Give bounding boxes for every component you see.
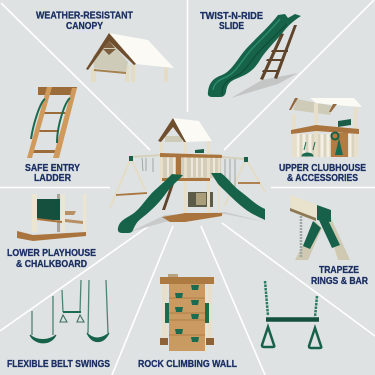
heading: weather-resistant canopy: WEATHER-RESISTANT [36, 10, 133, 22]
heading: twist-n-ride slide [200, 10, 263, 32]
swing frame right [222, 157, 265, 205]
heading: lower playhouse and chalkboard [7, 247, 96, 270]
right slide [211, 173, 265, 220]
heading: rock climbing wall: ROCK CLIMBING WALL [138, 358, 237, 370]
heading: safe entry ladder: LADDER [34, 172, 71, 184]
heading: flexible belt swings: FLEXIBLE BELT SWINGS [7, 358, 110, 370]
icon: lower playhouse [17, 194, 86, 241]
icon: upper clubhouse [289, 98, 362, 157]
icon: slide [208, 14, 301, 98]
swing frame left [110, 155, 162, 208]
icon: ladder [27, 87, 77, 158]
heading: lower playhouse and chalkboard: LOWER PLAYHOUSE [7, 247, 96, 259]
heading: upper clubhouse and accessories [279, 162, 366, 184]
heading: safe entry ladder [25, 162, 80, 184]
left slide [118, 174, 183, 233]
heading: twist-n-ride slide: SLIDE [219, 20, 244, 32]
heading: weather-resistant canopy: CANOPY [66, 20, 103, 32]
heading: trapeze rings and bar [311, 264, 368, 287]
heading: lower playhouse and chalkboard: & CHALKBOARD [16, 258, 87, 270]
heading: trapeze rings and bar: TRAPEZE [319, 264, 359, 276]
heading: twist-n-ride slide: TWIST-N-RIDE [200, 10, 263, 22]
heading: safe entry ladder: SAFE ENTRY [25, 162, 80, 174]
icon: canopy [86, 33, 174, 82]
clubhouse tower [158, 118, 222, 222]
icon: trapeze bar with rings [262, 281, 321, 348]
illustration: complete playset [110, 118, 265, 233]
heading: weather-resistant canopy [36, 10, 133, 32]
icon: belt swings and rings [30, 280, 109, 343]
icon: rock climbing wall [160, 274, 214, 351]
icon: trapeze bracket [290, 195, 350, 260]
heading: upper clubhouse and accessories: & ACCESSORIES [287, 172, 358, 184]
